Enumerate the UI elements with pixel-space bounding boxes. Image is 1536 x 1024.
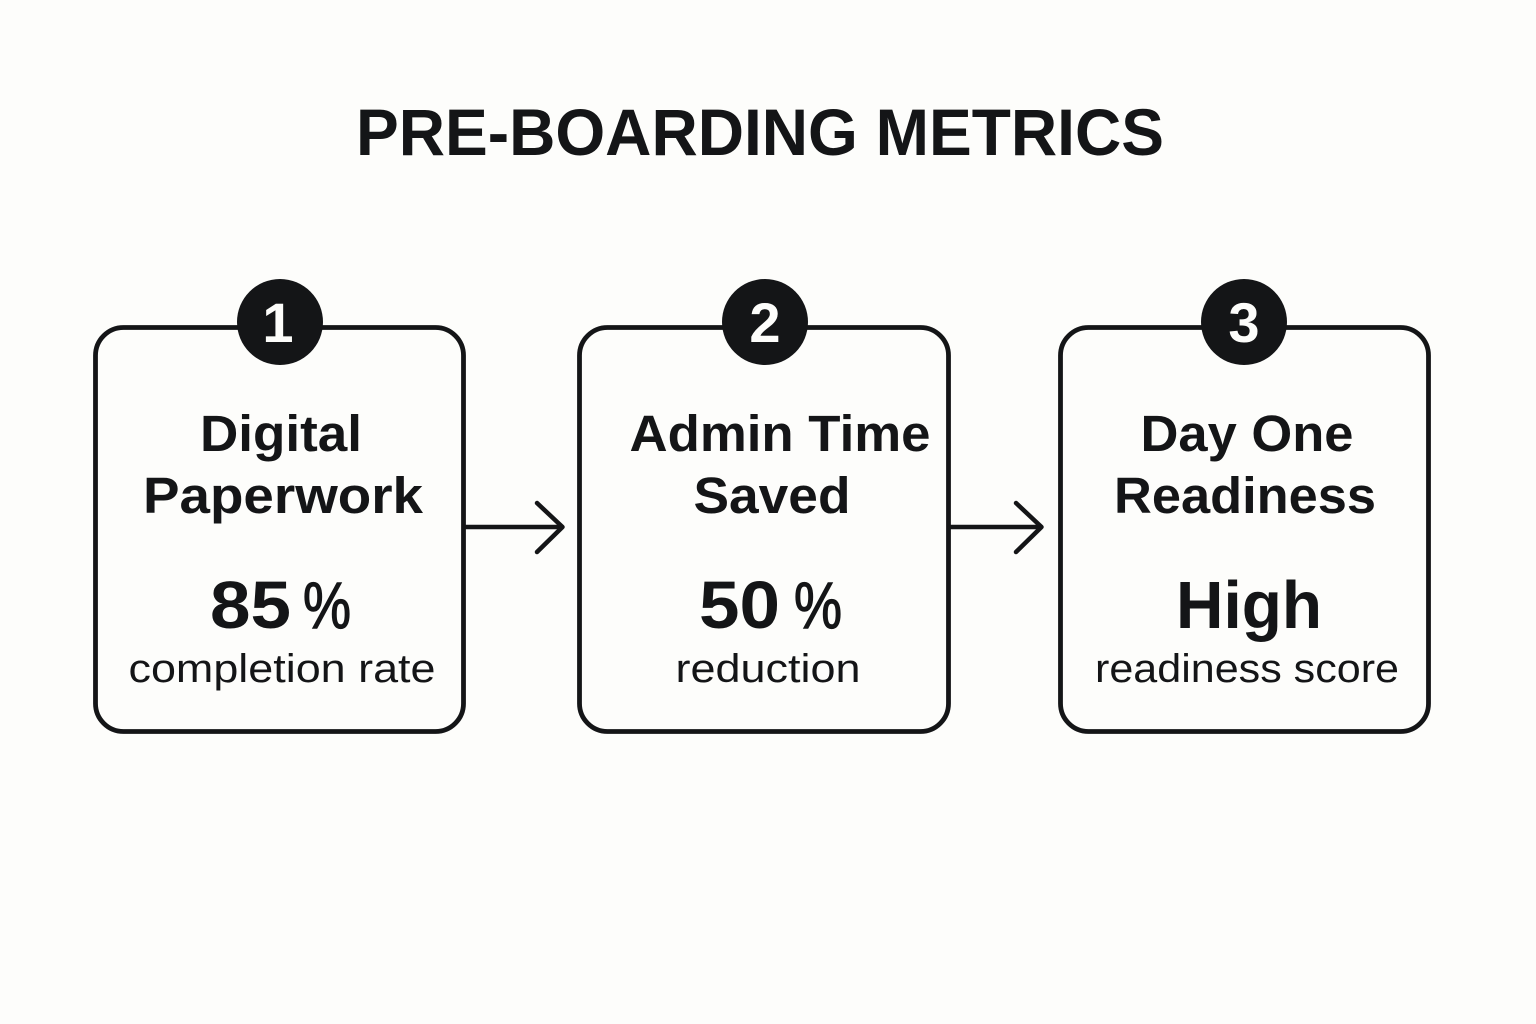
metric: 50%: 50 xyxy=(699,568,780,643)
badge: step 1 xyxy=(237,279,323,365)
metric: 85%: % xyxy=(303,568,351,642)
heading: day one readiness: Day One xyxy=(1140,405,1354,462)
panel: digital paperwork xyxy=(96,279,464,732)
metric: 85%: 85 xyxy=(210,568,291,643)
panel: day one readiness xyxy=(1060,279,1428,732)
heading: day one readiness xyxy=(1114,405,1376,524)
badge: step 2 xyxy=(722,279,808,365)
caption: completion rate: completion rate xyxy=(128,647,436,691)
badge: step 3: 3 xyxy=(1228,291,1260,354)
heading: digital paperwork xyxy=(143,405,424,524)
caption: reduction: reduction xyxy=(676,647,860,691)
heading: digital paperwork: Digital xyxy=(200,405,362,462)
arrow: step 1 to 2 xyxy=(465,503,562,552)
badge: step 2: 2 xyxy=(749,291,781,354)
title: PRE-BOARDING METRICS xyxy=(356,95,1164,169)
caption: readiness score: readiness score xyxy=(1095,647,1399,691)
heading: admin time saved xyxy=(630,405,930,524)
arrow: step 2 to 3 xyxy=(950,503,1042,552)
badge: step 1: 1 xyxy=(262,291,294,354)
heading: admin time saved: Admin Time xyxy=(630,405,930,462)
metric: 50%: % xyxy=(794,568,842,642)
badge: step 3 xyxy=(1201,279,1287,365)
heading: day one readiness: Readiness xyxy=(1114,467,1376,524)
panel: admin time saved xyxy=(580,279,948,732)
heading: digital paperwork: Paperwork xyxy=(143,467,424,524)
metric: 50% xyxy=(699,568,842,643)
metric: high: High xyxy=(1176,568,1322,643)
heading: admin time saved: Saved xyxy=(694,467,850,524)
metric: 85% xyxy=(210,568,351,643)
